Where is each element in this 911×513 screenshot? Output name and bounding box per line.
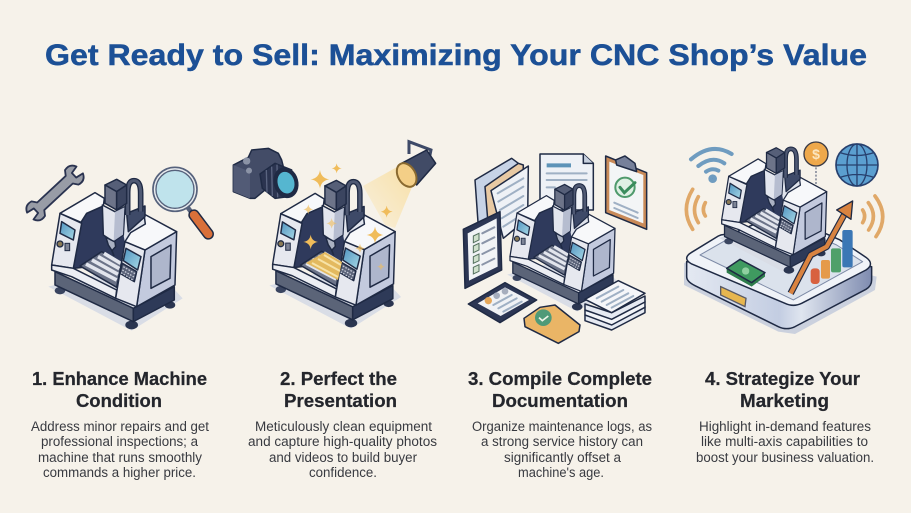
heading: step 3 xyxy=(468,368,652,411)
title: Get Ready to Sell: Maximizing Your CNC Shop’s Value xyxy=(45,39,867,72)
icon: dollar coin: $ xyxy=(812,146,820,162)
heading: step 2 xyxy=(280,368,397,411)
text: step 4 description: boost your business valuation. xyxy=(696,450,874,465)
text: step 3 description: Organize maintenance logs, as xyxy=(472,419,652,434)
illustration: machine with documents xyxy=(463,154,647,343)
heading: step 3: Documentation xyxy=(492,390,628,411)
icon: money xyxy=(727,259,765,287)
heading: step 4: Marketing xyxy=(740,390,829,411)
icon: clipboard with check xyxy=(606,156,647,229)
text: step 4 description: like multi-axis capabilities to xyxy=(701,434,868,449)
illustration: machine with camera and light xyxy=(233,142,436,329)
chart: rising bars xyxy=(811,230,853,284)
heading: step 1: 1. Enhance Machine xyxy=(32,368,207,389)
text: step 2 description: and capture high-quality photos xyxy=(248,434,437,449)
icon: CNC machine xyxy=(269,180,401,329)
text: step 2 description: confidence. xyxy=(309,465,377,480)
icon: wifi xyxy=(691,149,732,181)
heading: step 1 xyxy=(32,368,207,411)
heading: step 2: Presentation xyxy=(284,390,397,411)
icon: document page xyxy=(540,154,593,210)
icon: folder xyxy=(524,305,580,343)
icon: spotlight xyxy=(393,142,436,190)
panel: 3. Compile Complete Documentation xyxy=(463,154,652,480)
icon: binders xyxy=(475,158,528,238)
heading: step 4 xyxy=(705,368,860,411)
text: step 4 description xyxy=(696,419,874,465)
text: step 2 description: and videos to build buyer xyxy=(269,450,418,465)
illustration: machine with tools xyxy=(23,162,208,331)
icon: checklist tablet xyxy=(463,212,502,288)
text: step 3 description xyxy=(472,419,652,480)
icon: globe xyxy=(836,144,878,186)
icon: CNC machine xyxy=(507,184,620,312)
text: step 1 description: Address minor repairs and get xyxy=(31,419,209,434)
icon: flat tablet xyxy=(468,283,537,323)
sparkles xyxy=(303,163,393,271)
text: step 1 description: commands a higher price. xyxy=(43,465,196,480)
icon: platform xyxy=(684,213,877,334)
arrow: growth xyxy=(791,201,853,293)
icon: left signal waves xyxy=(686,189,705,229)
illustration: machine on platform with marketing icons xyxy=(684,142,883,334)
panel: 4. Strategize Your Marketing xyxy=(684,142,883,465)
text: step 1 description xyxy=(31,419,209,480)
text: step 1 description: machine that runs smoothly xyxy=(38,450,202,465)
icon: CNC machine xyxy=(719,148,832,275)
text: step 4 description: Highlight in-demand features xyxy=(699,419,871,434)
text: step 2 description xyxy=(248,419,437,480)
light beam xyxy=(363,167,412,228)
icon: paper stack xyxy=(585,281,645,330)
icon: wrench xyxy=(23,162,87,224)
icon: camera xyxy=(233,148,302,201)
text: step 3 description: a strong service history can xyxy=(481,434,643,449)
heading: step 4: 4. Strategize Your xyxy=(705,368,860,389)
text: step 3 description: significantly offset a xyxy=(504,450,622,465)
icon: right signal waves xyxy=(863,196,883,237)
icon: dollar coin xyxy=(804,142,828,185)
heading: step 3: 3. Compile Complete xyxy=(468,368,652,389)
glowing table xyxy=(306,252,342,280)
panel: 1. Enhance Machine Condition xyxy=(23,162,209,480)
text: step 2 description: Meticulously clean equipment xyxy=(255,419,432,434)
text: step 1 description: professional inspections; a xyxy=(41,434,199,449)
text: step 3 description: machine's age. xyxy=(518,465,604,480)
heading: step 2: 2. Perfect the xyxy=(280,368,397,389)
panel: 2. Perfect the Presentation xyxy=(233,142,437,480)
icon: magnifying glass xyxy=(153,167,208,234)
heading: step 1: Condition xyxy=(76,390,162,411)
icon: CNC machine xyxy=(48,179,183,331)
